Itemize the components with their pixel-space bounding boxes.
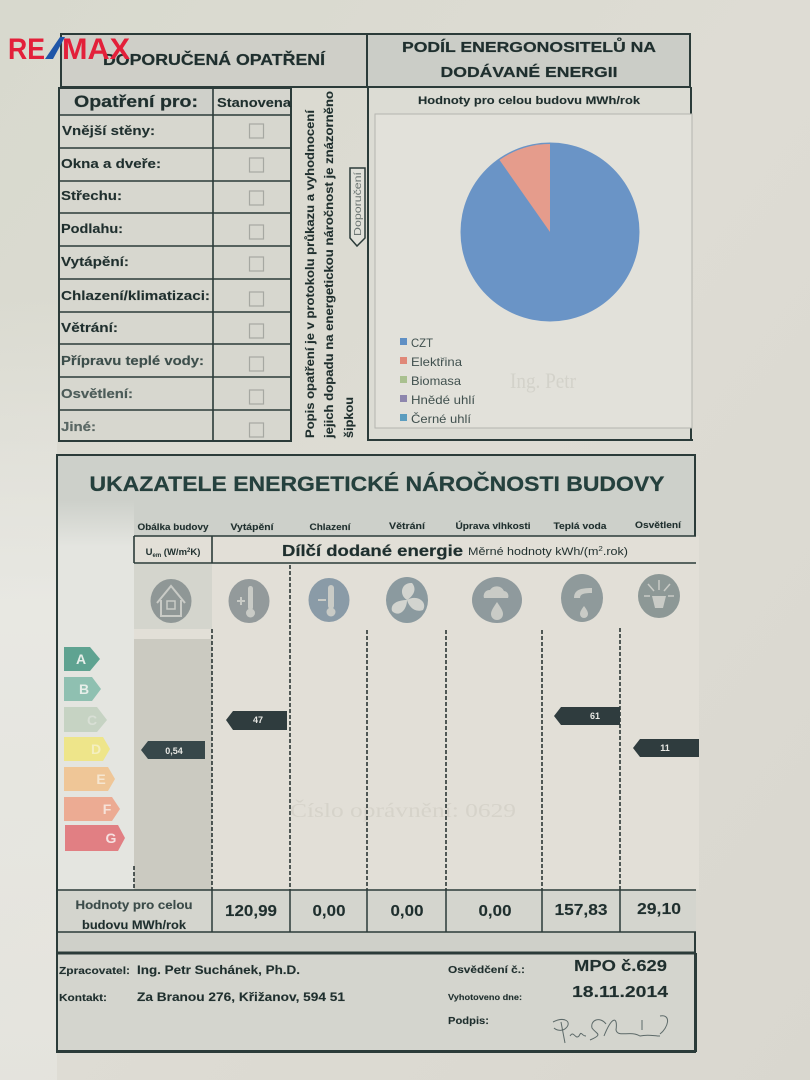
icon: heating thermometer <box>228 579 270 623</box>
legend: Černé uhlí <box>411 411 472 426</box>
panel: energy carriers share <box>367 34 693 440</box>
row labels: Chlazení/klimatizaci: <box>61 289 210 303</box>
legend: CZT <box>411 336 434 350</box>
heading: partial delivered energy: Dílčí dodané energie <box>282 543 463 560</box>
row labels <box>61 124 210 434</box>
icon: light bulb <box>638 574 680 618</box>
column labels: Obálka budovy <box>138 522 209 533</box>
footer: contact and certificate: Zpracovatel: <box>59 966 130 977</box>
vertical explanatory text: jejich dopadu na energetickou náročnost je znázorněno <box>322 91 336 439</box>
footer: contact and certificate: Podpis: <box>448 1016 489 1027</box>
heading: energy performance indicators: UKAZATELE ENERGETICKÉ NÁROČNOSTI BUDOVY <box>90 472 664 496</box>
checkboxes <box>250 124 264 437</box>
heading: energy carriers share: DODÁVANÉ ENERGII <box>440 64 618 81</box>
faint show-through text: Ing. Petr <box>510 368 577 393</box>
arrow: recommendation: Doporučení <box>353 172 364 236</box>
heading: recommended measures: DOPORUČENÁ OPATŘENÍ <box>103 51 326 69</box>
label: Uem unit: em <box>152 553 161 559</box>
pie chart <box>375 114 692 428</box>
total values: 120,99 <box>225 903 277 920</box>
vertical explanatory text <box>303 91 356 439</box>
subheading: whole building values: Hodnoty pro celou budovu MWh/rok <box>418 95 641 107</box>
envelope column shading <box>134 564 212 629</box>
column labels: Osvětlení <box>635 520 681 531</box>
logo: RE/MAX <box>8 33 130 66</box>
arrow: recommendation <box>350 168 365 246</box>
row labels: Jiné: <box>61 420 96 434</box>
marker: hot water 61 <box>554 707 620 725</box>
note: specific values: Měrné hodnoty kWh/(m <box>468 546 582 558</box>
column header: set: Stanovena <box>217 96 292 110</box>
marker: hot water 61: 61 <box>590 711 600 721</box>
row labels: Podlahu: <box>61 222 123 236</box>
column labels: Úprava vlhkosti <box>456 520 530 532</box>
column labels <box>138 520 681 533</box>
totals row <box>58 890 696 952</box>
signature <box>553 1016 668 1043</box>
energy class scale: E <box>96 771 106 787</box>
footer: contact and certificate: Za Branou 276, Křižanov, 594 51 <box>137 992 346 1004</box>
marker: envelope 0,54 <box>141 741 205 759</box>
row labels: Osvětlení: <box>61 387 133 401</box>
heading: energy carriers share <box>402 37 657 81</box>
energy class scale: D <box>91 741 101 757</box>
legend: Hnědé uhlí <box>411 393 476 407</box>
label: Uem unit: 2 <box>187 548 191 554</box>
note: specific values: 2 <box>598 546 603 553</box>
panel: energy performance indicators <box>57 455 699 1052</box>
marker: lighting 11: 11 <box>660 743 670 753</box>
icon: humidity <box>472 577 522 623</box>
energy class scale: C <box>87 712 97 728</box>
marker: heating 47 <box>226 711 287 730</box>
footer: contact and certificate: Ing. Petr Suchánek, Ph.D. <box>137 965 300 977</box>
row labels: Větrání: <box>61 321 118 335</box>
panel: recommended measures <box>59 34 367 441</box>
marker: lighting 11 <box>633 739 699 757</box>
row labels: Okna a dveře: <box>61 157 161 171</box>
total values <box>225 901 681 920</box>
footer: contact and certificate <box>58 953 697 1051</box>
icon: house <box>150 579 192 623</box>
row labels: Vytápění: <box>61 255 129 269</box>
column header: measures for: Opatření pro: <box>74 92 198 111</box>
label: Uem unit: U <box>146 547 152 558</box>
total values: 0,00 <box>312 903 346 920</box>
legend: Elektřina <box>411 355 462 369</box>
energy class scale: A <box>76 651 86 667</box>
marker: heating 47: 47 <box>253 715 263 725</box>
footer: contact and certificate: MPO č.629 <box>574 958 667 975</box>
footer: contact and certificate: Vyhotoveno dne: <box>448 992 522 1002</box>
label: whole building values: budovu MWh/rok <box>82 918 186 932</box>
energy class scale: F <box>103 801 112 817</box>
marker: envelope 0,54: 0,54 <box>165 746 183 756</box>
energy class scale <box>64 647 125 851</box>
vertical explanatory text: Popis opatření je v protokolu průkazu a vyhodnocení <box>303 109 317 438</box>
total values: 0,00 <box>478 903 512 920</box>
total values: 0,00 <box>390 903 424 920</box>
label: Uem unit: (W/m <box>161 547 187 558</box>
label: whole building values <box>76 898 192 932</box>
icon: water tap <box>561 574 603 622</box>
legend: Biomasa <box>411 374 461 388</box>
heading: energy carriers share: PODÍL ENERGONOSITELŮ NA <box>402 37 657 56</box>
legend <box>400 336 476 426</box>
column labels: Teplá voda <box>554 521 607 532</box>
label: whole building values: Hodnoty pro celou <box>76 898 192 912</box>
footer: contact and certificate: 18.11.2014 <box>572 984 668 1001</box>
logo: RE/MAX: MAX <box>62 33 130 66</box>
note: specific values: .rok) <box>603 546 628 558</box>
vertical explanatory text: šipkou <box>342 397 356 438</box>
row labels: Vnější stěny: <box>62 124 155 138</box>
faint show-through text: Číslo oprávnění: 0629 <box>290 798 516 822</box>
row labels: Střechu: <box>61 189 122 203</box>
total values: 157,83 <box>554 902 608 919</box>
footer: contact and certificate: Kontakt: <box>59 993 107 1004</box>
column labels: Chlazení <box>310 522 351 533</box>
logo: RE/MAX: RE <box>8 33 45 66</box>
column labels: Větrání <box>389 521 425 532</box>
footer: contact and certificate: Osvědčení č.: <box>448 965 525 976</box>
label: Uem unit: K) <box>190 547 200 558</box>
icon: fan <box>386 577 428 623</box>
energy class scale: G <box>106 830 117 846</box>
column labels: Vytápění <box>230 522 274 533</box>
dashed column dividers <box>134 565 620 890</box>
row labels: Přípravu teplé vody: <box>61 354 204 368</box>
energy class scale: B <box>79 681 89 697</box>
total values: 29,10 <box>637 901 681 918</box>
icon: cooling thermometer <box>308 578 350 622</box>
